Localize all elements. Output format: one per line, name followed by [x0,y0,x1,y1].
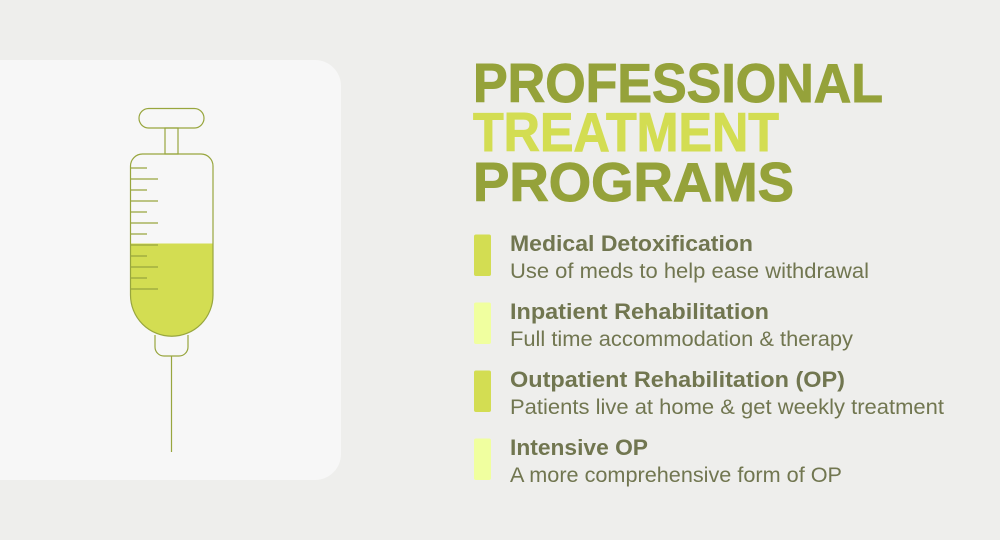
marker [474,302,491,344]
syringe needle [170,356,172,452]
syringe plunger rod [165,128,178,154]
item description: A more comprehensive form of OP [510,464,842,487]
syringe liquid [130,244,213,336]
title line 1: PROFESSIONAL [473,52,883,114]
item heading: Intensive OP [510,435,648,460]
item heading: Inpatient Rehabilitation [510,299,769,324]
panel: syringe card [0,60,341,480]
list item 2 [474,299,854,351]
marker [474,438,491,480]
syringe plunger handle [139,108,204,128]
syringe barrel [130,154,213,336]
title line 3: PROGRAMS [473,151,794,213]
item heading: Outpatient Rehabilitation (OP) [510,367,845,392]
list item 3 [474,367,944,419]
title [473,52,883,213]
title line 2: TREATMENT [473,101,779,163]
item heading: Medical Detoxification [510,231,753,256]
icon: syringe [130,108,213,452]
list item 1 [474,231,869,283]
item description: Use of meds to help ease withdrawal [510,260,869,283]
list item 4 [474,435,842,487]
marker [474,234,491,276]
syringe nozzle [155,335,188,356]
item description: Full time accommodation & therapy [510,328,854,351]
item description: Patients live at home & get weekly treatment [510,396,944,419]
syringe measurement marks [130,168,158,289]
marker [474,370,491,412]
